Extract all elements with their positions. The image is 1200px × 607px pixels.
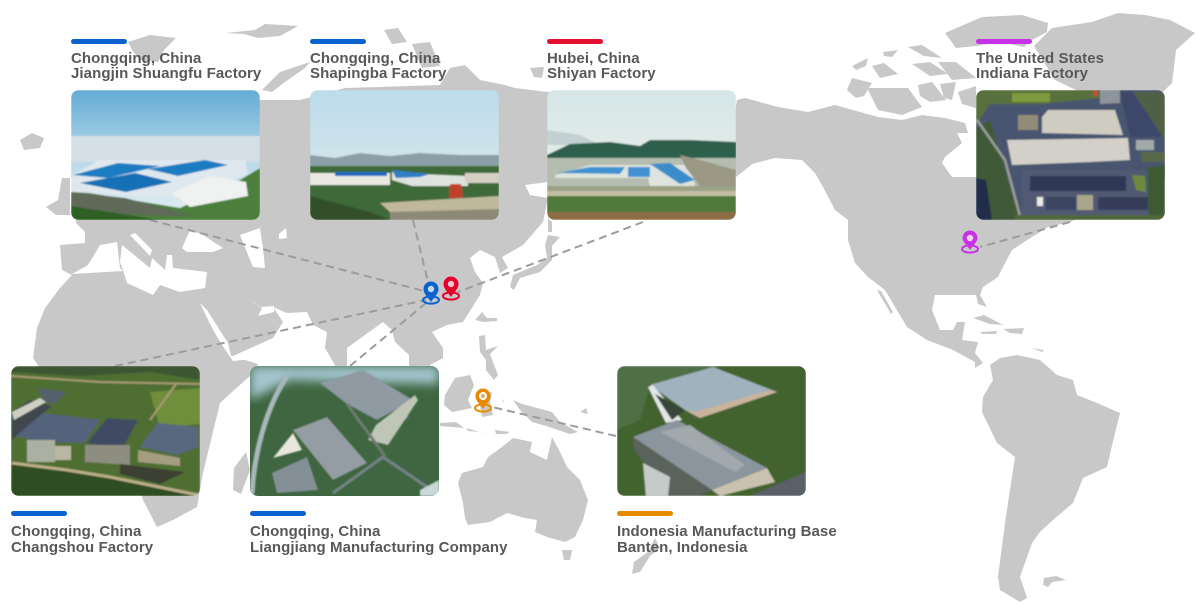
landmass: Banks Island <box>847 78 872 98</box>
landmass: New Guinea <box>513 400 578 434</box>
line: Shiyan to pin <box>458 222 643 292</box>
line: Shapingba to pin <box>413 220 428 282</box>
landmass: South America <box>982 355 1120 602</box>
landmass: Cuba <box>973 315 1003 325</box>
location heading: Chongqing, China <box>11 523 141 540</box>
line: Jiangjin to pin <box>150 220 428 292</box>
accent bar <box>11 511 67 516</box>
photo: Changshou factory <box>11 366 200 496</box>
location heading: Chongqing, China <box>310 50 440 67</box>
location heading: Banten, Indonesia <box>617 539 748 556</box>
location heading: The United States <box>976 50 1104 67</box>
landmass: Sakhalin <box>548 218 552 232</box>
landmass: Svalbard <box>128 35 176 62</box>
sea: Persian Gulf <box>248 298 274 316</box>
pin: purple United States <box>962 231 978 253</box>
location heading: Chongqing, China <box>250 523 380 540</box>
landmass: Japan <box>510 235 560 290</box>
photo: Jiangjin factory <box>71 90 260 220</box>
accent bar <box>250 511 306 516</box>
accent bar <box>71 39 127 44</box>
pin: red Hubei <box>443 276 459 300</box>
photo: Indiana factory <box>976 90 1165 220</box>
pin: blue Chongqing <box>423 282 439 304</box>
card: Indonesia Manufacturing Base <box>617 366 837 556</box>
card: Shiyan Factory <box>547 39 736 220</box>
photo: Indonesia factory <box>617 366 806 497</box>
landmass: Taiwan <box>475 312 497 322</box>
location heading: Shapingba Factory <box>310 65 447 82</box>
landmass: North America <box>730 98 1165 368</box>
landmass: Madagascar <box>233 452 250 494</box>
landmass: Franz Josef Land <box>226 24 298 38</box>
landmass: Sulawesi <box>478 392 493 417</box>
line: Changshou to pin <box>115 300 426 366</box>
landmass: Baja California <box>877 290 893 314</box>
landmass: Victoria Island <box>867 88 922 115</box>
landmass: Baffin area islands <box>918 82 946 102</box>
connector lines <box>115 220 1070 436</box>
line: Liangjiang to pin <box>350 303 426 366</box>
pin: orange Indonesia <box>475 389 491 412</box>
landmass: Tasmania <box>562 550 572 560</box>
sea: Caspian <box>240 228 265 268</box>
landmass: Hispaniola and Caribbean <box>1003 328 1024 334</box>
landmass: United Kingdom <box>46 178 70 215</box>
location heading: Hubei, China <box>547 50 640 67</box>
card: Liangjiang Manufacturing Company <box>250 366 508 556</box>
landmass: Severnaya Zemlya <box>384 28 407 44</box>
location heading: Changshou Factory <box>11 539 154 556</box>
card: Shapingba Factory <box>310 39 499 220</box>
accent bar <box>310 39 366 44</box>
accent bar <box>547 39 603 44</box>
photo: Shiyan factory <box>547 90 736 220</box>
sea: Black Sea <box>182 230 223 252</box>
card: Jiangjin Shuangfu Factory <box>71 39 262 220</box>
landmass: Moluccas and Timor <box>502 398 504 402</box>
landmass: Eurasia and Africa <box>33 65 730 527</box>
card: Indiana Factory <box>976 39 1165 220</box>
landmass: Ellesmere Island <box>945 15 1048 48</box>
location heading: Indonesia Manufacturing Base <box>617 523 837 540</box>
sea: Mediterranean <box>72 228 287 361</box>
landmass: New Siberian Islands <box>530 67 544 78</box>
landmass: New Zealand <box>632 538 660 574</box>
landmass: Iceland <box>20 133 44 150</box>
location heading: Liangjiang Manufacturing Company <box>250 539 508 556</box>
landmass: Borneo <box>444 375 474 412</box>
accent bar <box>617 511 673 516</box>
card: Changshou Factory <box>11 366 200 556</box>
accent bar <box>976 39 1032 44</box>
photo: Shapingba factory <box>310 90 499 220</box>
landmass: Falkland Islands <box>1043 576 1066 587</box>
location heading: Chongqing, China <box>71 50 201 67</box>
landmass: Java <box>440 422 464 428</box>
location heading: Indiana Factory <box>976 65 1089 82</box>
landmass: Philippines <box>479 335 498 380</box>
location heading: Shiyan Factory <box>547 65 656 82</box>
sea: Red Sea <box>200 303 262 361</box>
line: Indiana to pin <box>980 222 1070 247</box>
photo: Liangjiang factory <box>250 366 439 496</box>
landmass: Greenland <box>1034 13 1195 92</box>
landmass: Australia <box>458 437 588 542</box>
line: Indonesia to pin <box>492 407 616 436</box>
location heading: Jiangjin Shuangfu Factory <box>71 65 262 82</box>
landmass: Novaya Zemlya <box>262 62 310 92</box>
